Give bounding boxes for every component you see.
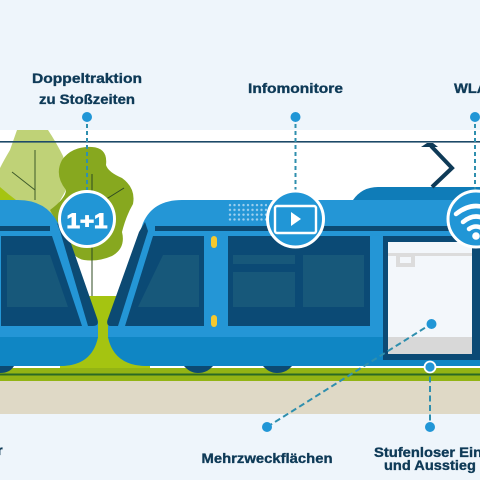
connector: Stufenloser Einstieg: [424, 362, 436, 432]
front window: [125, 236, 204, 326]
roof dark stripe: [155, 226, 480, 231]
connector: Doppeltraktion: [82, 112, 92, 192]
icon: wifi badge: [448, 191, 480, 247]
roof unit: [353, 187, 480, 200]
vent dots: [228, 203, 267, 222]
heading: Doppeltraktion: [32, 71, 142, 107]
heading: Stufenloser Einstieg: Stufenloser Ein-: [374, 445, 480, 460]
light tree: [0, 130, 66, 215]
heading: Doppeltraktion: Doppeltraktion: [32, 71, 142, 86]
left tram window: [1, 236, 82, 326]
heading: Doppeltraktion: zu Stoßzeiten: [39, 92, 135, 107]
wheels: [0, 366, 292, 373]
connector: WLAN: [470, 112, 480, 192]
right tram body: [107, 187, 480, 366]
heading: Infomonitore: Infomonitore: [248, 81, 344, 96]
grass patch between trams: [60, 296, 150, 368]
heading: Mehrzweckflächen: Mehrzweckflächen: [202, 451, 332, 466]
icon: 1+1 badge: 1+1: [66, 210, 108, 233]
heading: Stufenloser Einstieg: und Ausstieg: [384, 458, 476, 473]
connector: Infomonitore: [290, 112, 300, 192]
icon: 1+1 badge: [60, 192, 114, 246]
front dark stripe: [107, 222, 148, 326]
heading: Stufenloser Einstieg: [374, 445, 480, 473]
yellow handles: [211, 236, 217, 327]
door: [383, 236, 480, 360]
pantograph: [421, 143, 452, 187]
overhead wire: [0, 141, 480, 143]
white scene band: [0, 130, 480, 370]
dark tree: [50, 147, 134, 296]
connector: Mehrzweckflächen: [262, 319, 436, 432]
middle windows: [228, 236, 370, 326]
left tram: [0, 200, 98, 366]
icon: monitor badge: [268, 191, 324, 247]
track bed: [0, 368, 480, 414]
